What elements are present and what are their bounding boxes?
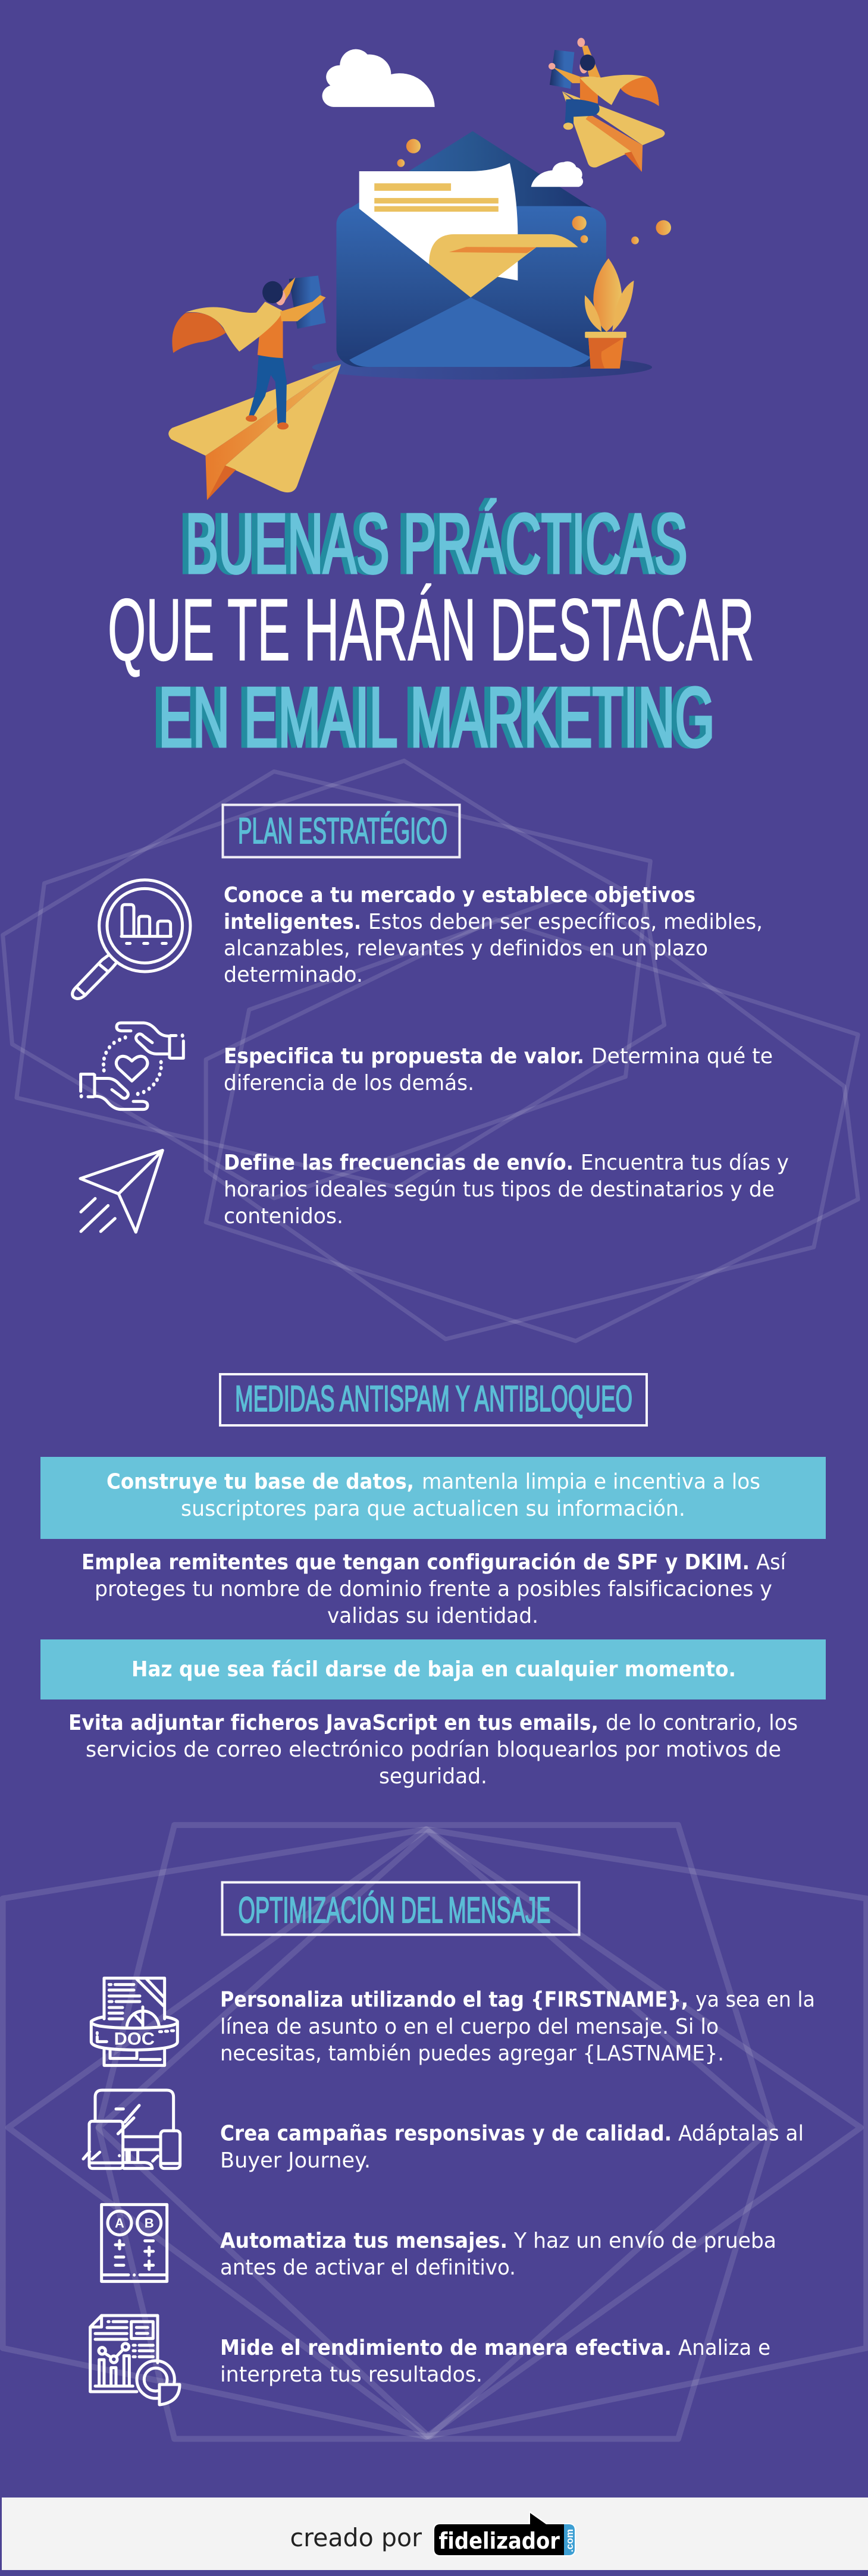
text: ficheros JavaScript: servicios de correo electrónico podrían bloquearlos por motivos de <box>86 1738 781 1762</box>
icon: paper plane <box>80 1150 162 1232</box>
text: frecuencias de envío: contenidos. <box>224 1204 343 1229</box>
coins <box>397 139 671 244</box>
text: automatiza <box>220 2229 776 2280</box>
text: SPF y DKIM: proteges tu nombre de dominio frente a posibles falsificaciones y <box>95 1577 772 1601</box>
text: propuesta de valor: Especifica tu propuesta de valor. <box>224 1044 584 1069</box>
icon: DOC document: DOC <box>114 2029 155 2049</box>
text: automatiza: Y haz un envío de prueba <box>513 2229 776 2253</box>
text: conoce a tu mercado: alcanzables, relevantes y definidos en un plazo <box>224 936 708 961</box>
icon: A/B test sheet <box>102 2204 167 2282</box>
icon: magnifier with bar chart <box>73 880 190 998</box>
text: conoce a tu mercado <box>224 883 763 987</box>
text: automatiza: Automatiza tus mensajes. <box>220 2229 507 2253</box>
text: ficheros JavaScript <box>68 1711 798 1789</box>
credit text: creado por <box>290 2523 422 2552</box>
footer <box>2 2498 868 2570</box>
text: campañas responsivas: Adáptalas al <box>678 2122 804 2145</box>
icon: responsive devices <box>83 2090 180 2169</box>
text: mide el rendimiento: Mide el rendimiento de manera efectiva. <box>220 2336 672 2360</box>
heading: optimización del mensaje <box>223 1883 579 1935</box>
small paper plane with character <box>549 38 665 172</box>
icon: A/B test sheet: B <box>145 2216 154 2231</box>
cloud small <box>531 161 583 187</box>
band: darse de baja: Haz que sea fácil darse de baja en cualquier momento. <box>131 1657 736 1682</box>
text: campañas responsivas <box>220 2122 804 2173</box>
title <box>108 497 754 764</box>
text: frecuencias de envío: Define las frecuencias de envío. <box>224 1151 574 1175</box>
large paper plane <box>168 365 341 500</box>
band: construye tu base de datos: Construye tu base de datos, <box>106 1470 414 1494</box>
text: automatiza: antes de activar el definitivo. <box>220 2255 516 2280</box>
text: propuesta de valor: Determina qué te <box>591 1044 773 1069</box>
text: personaliza: Personaliza utilizando el tag {FIRSTNAME}, <box>220 1987 688 2012</box>
icon: A/B test sheet: A <box>115 2216 124 2231</box>
background polygons section 1 <box>3 761 858 1341</box>
text: mide el rendimiento: Analiza e <box>678 2336 770 2360</box>
icon: hands with heart <box>80 1023 184 1110</box>
text: propuesta de valor: diferencia de los demás. <box>224 1071 474 1095</box>
text: personaliza: ya sea en la <box>695 1987 815 2012</box>
text: SPF y DKIM: validas su identidad. <box>327 1604 538 1628</box>
character on large plane <box>172 275 326 429</box>
icon: DOC document <box>91 1978 177 2065</box>
band: construye tu base de datos: suscriptores para que actualicen su información. <box>181 1497 685 1521</box>
text: frecuencias de envío <box>224 1151 789 1229</box>
band: construye tu base de datos <box>40 1457 826 1539</box>
text: campañas responsivas: Buyer Journey. <box>220 2148 371 2173</box>
panel: medidas antispam y antibloqueo <box>40 1374 826 1789</box>
text: campañas responsivas: Crea campañas responsivas y de calidad. <box>220 2122 672 2145</box>
text: conoce a tu mercado: Conoce a tu mercado y establece objetivos <box>224 883 695 907</box>
text: SPF y DKIM <box>82 1550 786 1628</box>
text: frecuencias de envío: horarios ideales según tus tipos de destinatarios y de <box>224 1177 775 1202</box>
text: ficheros JavaScript: seguridad. <box>379 1764 487 1789</box>
envelope <box>336 131 606 367</box>
text: SPF y DKIM: Así <box>756 1550 786 1575</box>
logo: fidelizador.com: fidelizador <box>439 2528 560 2554</box>
envelope shadow <box>312 355 652 379</box>
text: mide el rendimiento <box>220 2336 770 2387</box>
plant in pot <box>585 258 634 369</box>
text: personaliza: línea de asunto o en el cuerpo del mensaje. Si lo <box>220 2015 719 2039</box>
cloud large <box>322 49 435 107</box>
text: conoce a tu mercado: determinado. <box>224 963 363 987</box>
heading: medidas antispam <box>220 1374 647 1425</box>
text: personaliza: necesitas, también puedes agregar {LASTNAME}. <box>220 2041 724 2066</box>
hero illustration: envelope, paper planes and characters <box>168 38 671 500</box>
logo: fidelizador.com: .com <box>564 2529 575 2552</box>
text: propuesta de valor <box>224 1044 773 1095</box>
background polygons section 3 <box>3 1825 866 2439</box>
text: SPF y DKIM: Emplea remitentes que tengan configuración de SPF y DKIM. <box>82 1550 750 1575</box>
panel: optimización del mensaje <box>3 1825 866 2439</box>
text: frecuencias de envío: Encuentra tus días y <box>581 1151 789 1175</box>
logo: fidelizador.com <box>433 2511 576 2556</box>
band: construye tu base de datos: mantenla limpia e incentiva a los <box>422 1470 760 1494</box>
panel: plan estratégico <box>3 761 858 1341</box>
text: mide el rendimiento: interpreta tus resultados. <box>220 2363 482 2387</box>
text: conoce a tu mercado: inteligentes. <box>224 910 361 934</box>
text: personaliza <box>220 1987 815 2066</box>
heading: plan estratégico <box>223 805 459 857</box>
text: conoce a tu mercado: Estos deben ser específicos, medibles, <box>368 910 763 934</box>
text: ficheros JavaScript: de lo contrario, los <box>606 1711 798 1735</box>
icon: report with charts <box>90 2316 180 2405</box>
band: darse de baja <box>40 1639 826 1699</box>
text: ficheros JavaScript: Evita adjuntar ficheros JavaScript en tus emails, <box>68 1711 598 1735</box>
